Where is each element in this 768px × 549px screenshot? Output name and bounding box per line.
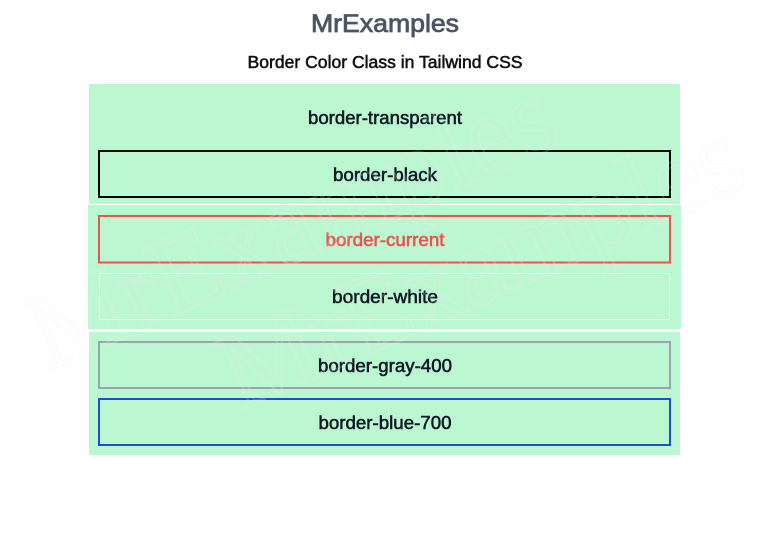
subtitle: Border Color Class in Tailwind CSS: [248, 52, 522, 72]
box: border-white: [100, 274, 670, 320]
box: border-gray-400: [99, 342, 670, 388]
panel: group three: [89, 332, 680, 455]
box: border-blue-700: [99, 399, 670, 445]
watermark: second: MrExamples: [200, 94, 762, 435]
box: border-black: [99, 151, 670, 197]
box: border-current: border-current: [326, 230, 444, 250]
watermark: first: MrExamples: [8, 52, 574, 395]
box: border-current: [99, 216, 670, 262]
panel: group one: [89, 84, 680, 204]
title: MrExamples: [311, 10, 459, 38]
box: border-blue-700: border-blue-700: [318, 413, 452, 433]
label: border-transparent: border-transparent: [308, 108, 462, 128]
box: border-white: border-white: [332, 287, 438, 307]
box: border-gray-400: border-gray-400: [318, 356, 452, 376]
panel: group two: [88, 205, 681, 329]
box: border-black: border-black: [333, 165, 438, 185]
